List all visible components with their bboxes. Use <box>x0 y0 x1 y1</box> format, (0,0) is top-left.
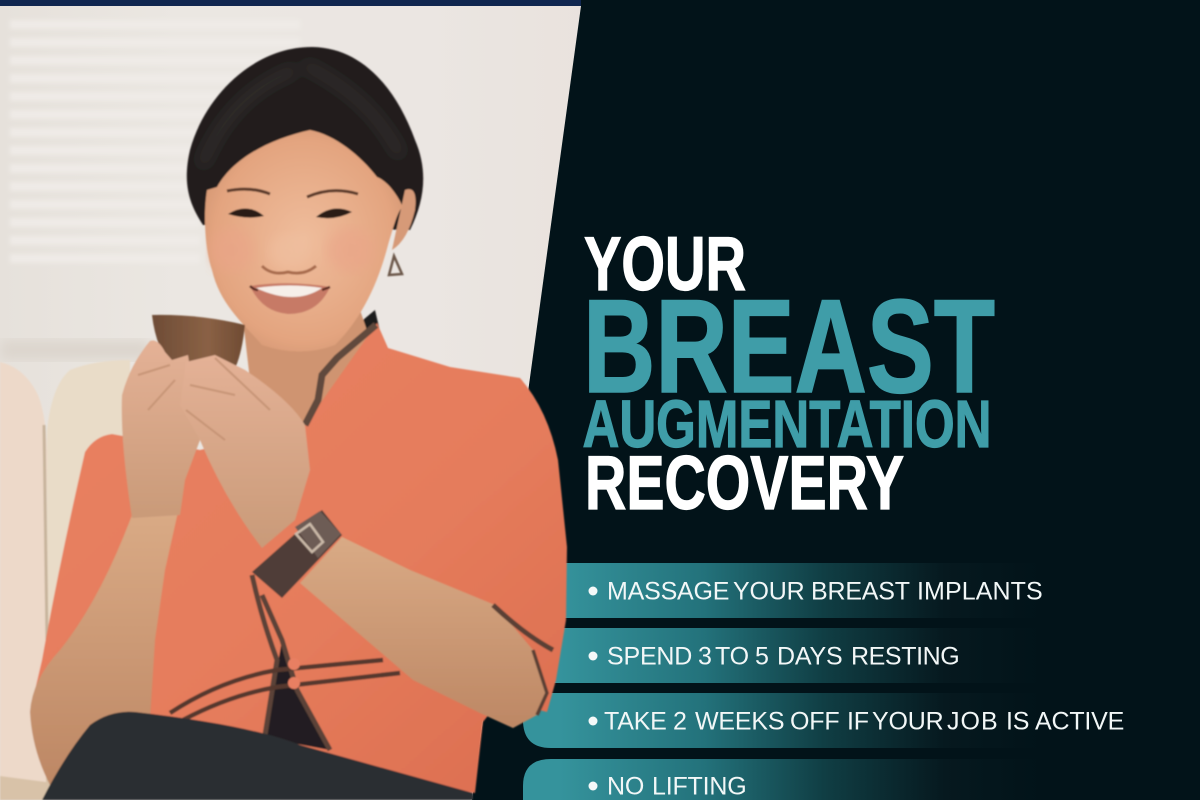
left forearm <box>30 512 178 785</box>
title line: augmentation: AUGMENTATION <box>582 387 992 462</box>
placket trim <box>252 575 330 750</box>
sofa <box>0 360 130 800</box>
tip 2: resting: TO <box>715 642 749 670</box>
tip 2: resting: 3 <box>698 642 712 670</box>
title <box>582 222 995 526</box>
photo: woman with cup on sofa <box>0 47 567 800</box>
hair <box>187 47 423 230</box>
finger lines <box>138 358 270 440</box>
tip 1: massage: BREAST <box>811 578 910 606</box>
facial features <box>210 189 374 314</box>
tip 2: resting: 5 <box>755 642 769 670</box>
tip 3: time off work: 2 <box>673 708 687 736</box>
tip 3: time off work: IS <box>1006 708 1029 736</box>
tip 3: time off work: WEEKS <box>695 708 784 736</box>
hair bun at nape <box>363 310 382 345</box>
nose <box>268 234 308 270</box>
sleeve trim <box>493 605 553 715</box>
jeans <box>42 712 473 800</box>
ear <box>392 189 416 250</box>
tip 1: massage <box>530 563 1043 618</box>
right hand <box>180 355 310 548</box>
tip 2: resting: DAYS <box>777 642 842 670</box>
tip 1: massage: IMPLANTS <box>917 578 1043 606</box>
mouth <box>250 283 330 314</box>
tip 3: time off work: JOB <box>947 708 999 736</box>
wristwatch band <box>252 510 342 598</box>
waist trim <box>170 660 400 720</box>
cup <box>152 315 245 372</box>
tip 3: time off work: YOUR <box>872 708 943 736</box>
eyebrows <box>227 189 358 197</box>
tip 2: resting: SPEND <box>607 642 692 670</box>
cheeks <box>210 228 254 272</box>
blouse <box>35 323 567 793</box>
tip 4: no lifting <box>523 759 1040 800</box>
tip 2: resting <box>530 628 1040 683</box>
top navy strip <box>0 0 581 6</box>
tip 3: time off work: OFF <box>790 708 839 736</box>
collar trim <box>305 325 376 425</box>
title line: recovery: RECOVERY <box>585 441 904 526</box>
dark undershirt <box>265 640 330 750</box>
tip 1: massage: YOUR <box>733 578 804 606</box>
title line: breast: BREAST <box>583 273 995 421</box>
left hand <box>122 340 200 518</box>
tip 3: time off work: IF <box>847 708 869 736</box>
tip 3: time off work: ACTIVE <box>1035 708 1124 736</box>
title line: your: YOUR <box>584 222 746 307</box>
tip 4: no lifting: LIFTING <box>652 772 746 800</box>
neck <box>243 310 372 430</box>
tip 2: resting: RESTING <box>851 642 959 670</box>
wall and window blinds <box>0 6 600 800</box>
face <box>205 130 403 352</box>
right forearm <box>300 537 547 728</box>
earrings <box>389 256 402 275</box>
eyes <box>228 208 264 218</box>
tip 3: time off work: TAKE <box>604 708 667 736</box>
hair highlights <box>202 65 400 165</box>
recovery tips list <box>523 563 1124 800</box>
waist buttons <box>288 658 300 689</box>
tip 1: massage: MASSAGE <box>607 578 729 606</box>
tip 3: time off work <box>523 693 1124 748</box>
tip 4: no lifting: NO <box>607 772 644 800</box>
